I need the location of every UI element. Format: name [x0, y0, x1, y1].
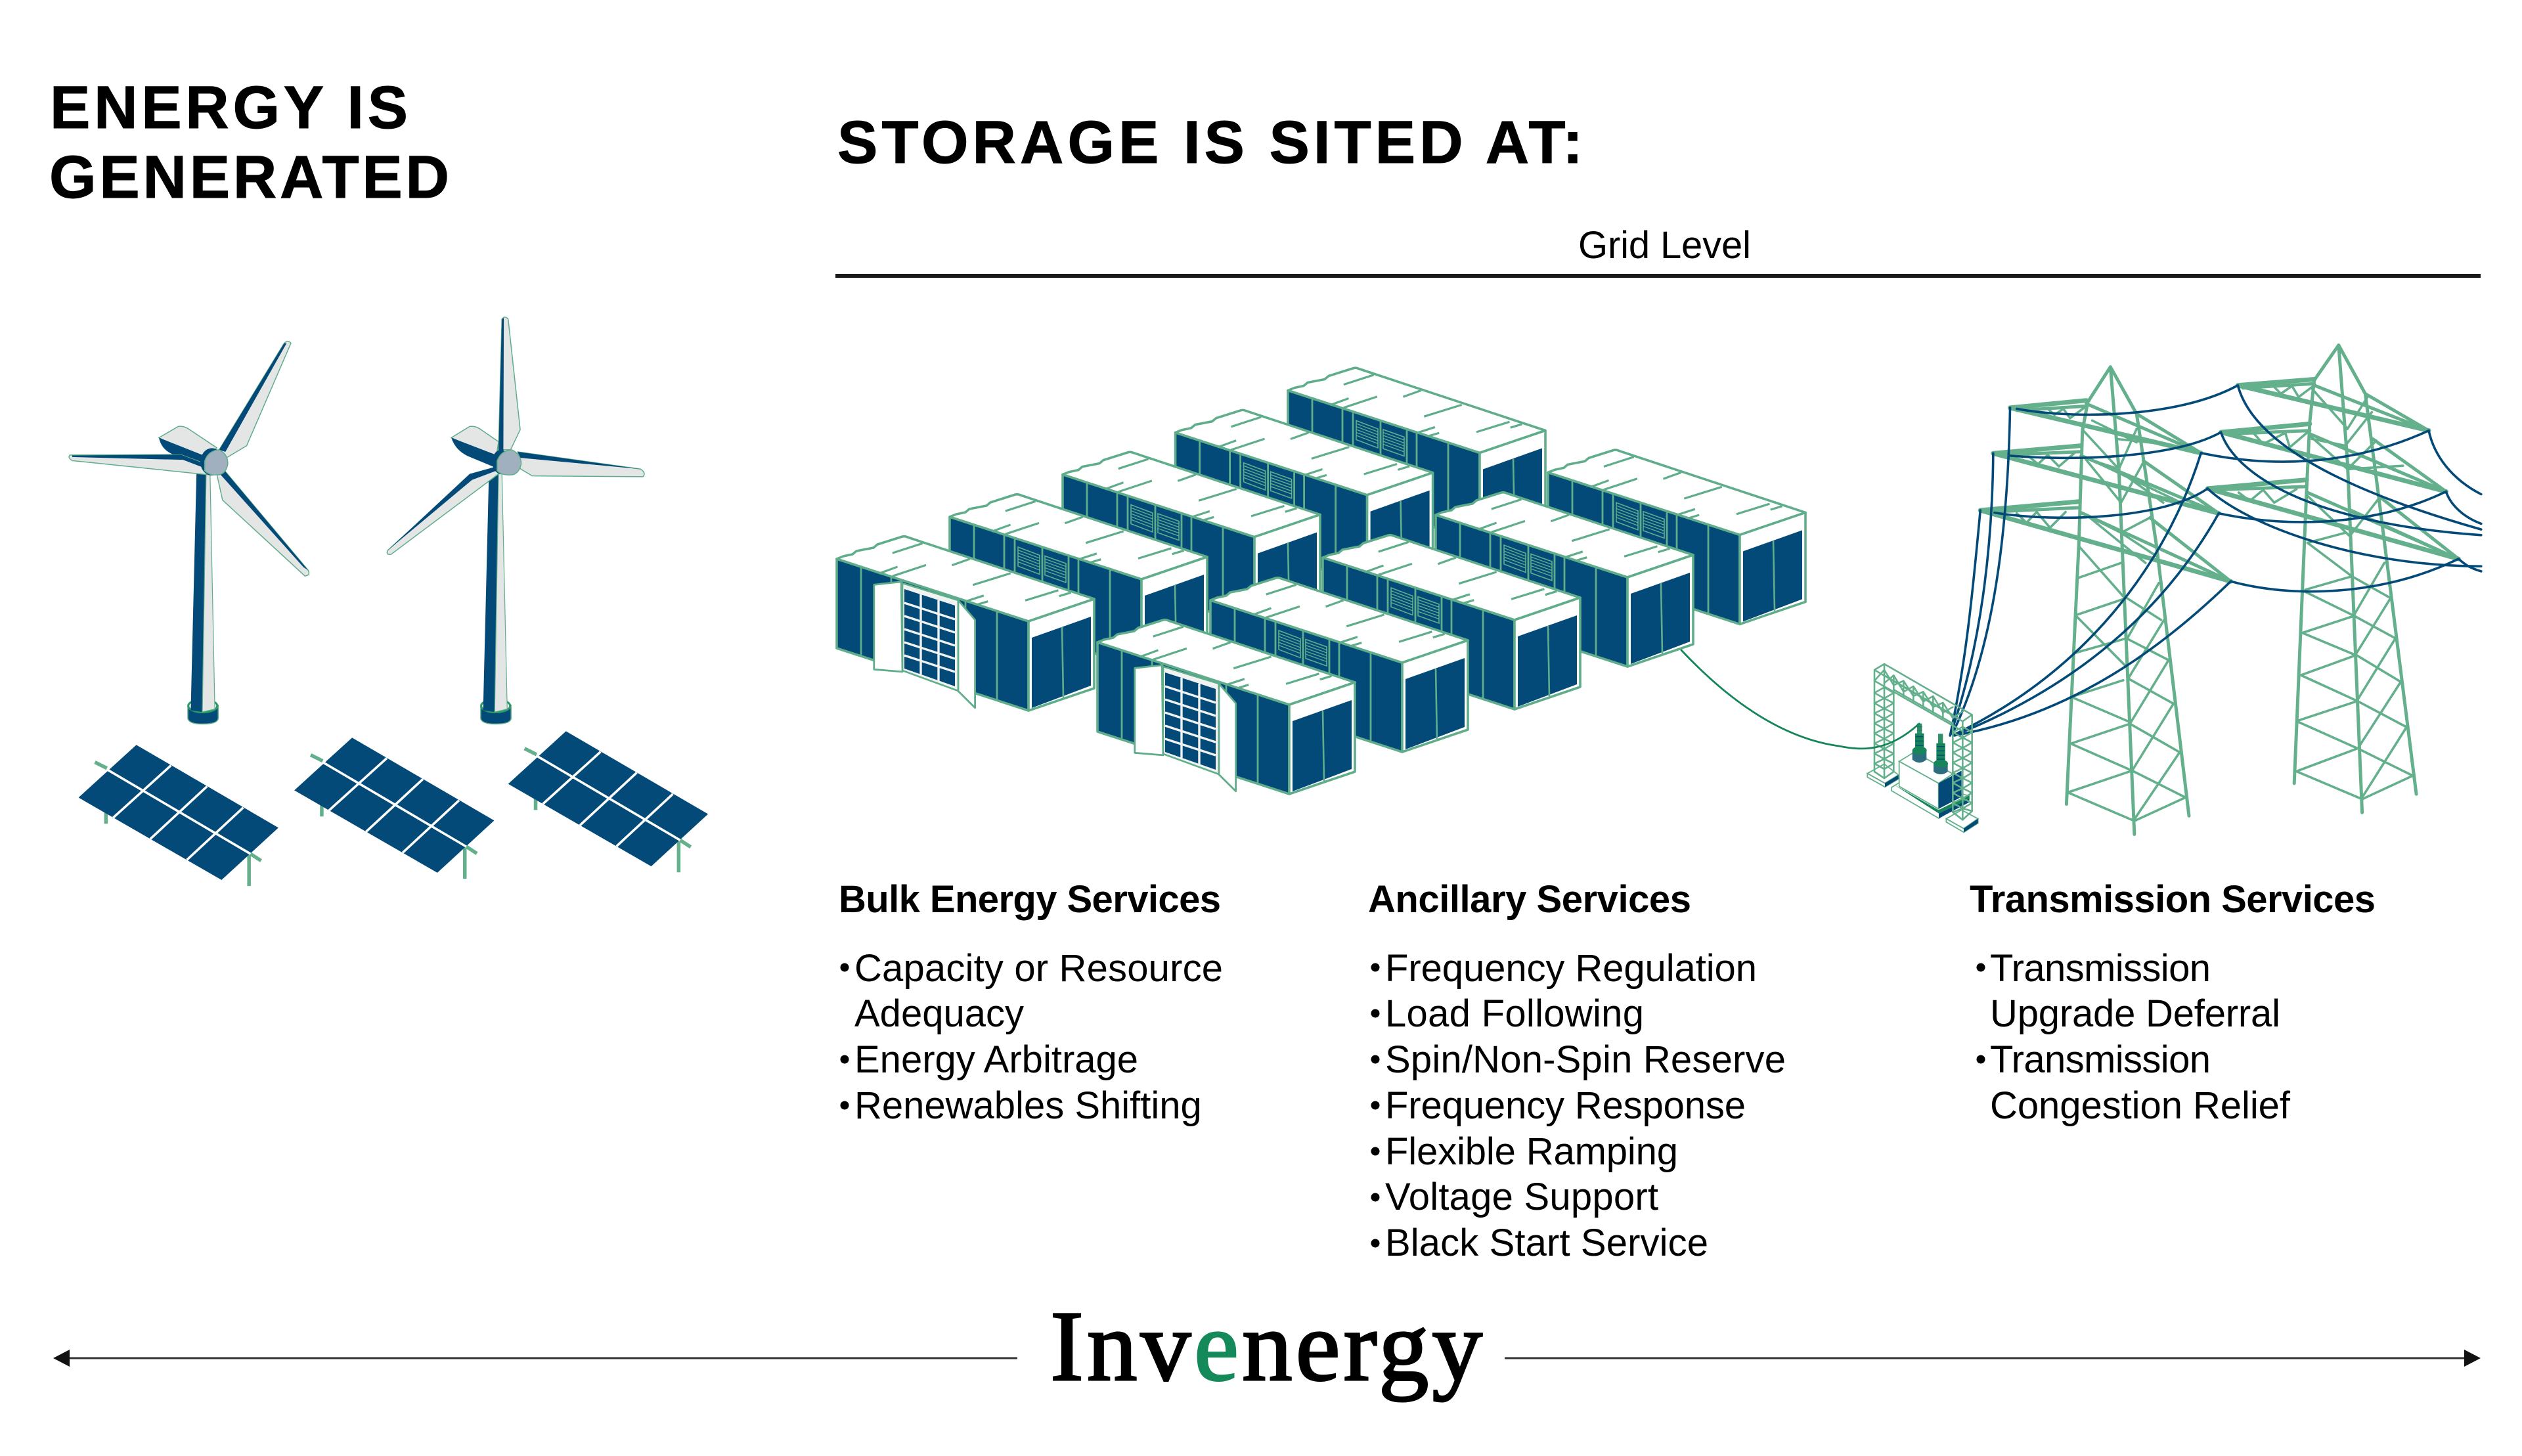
solar panel 2 — [294, 738, 494, 879]
right gantry foot — [1946, 810, 1978, 832]
list: bulk energy services: Renewables Shifting — [854, 1084, 1202, 1127]
container row back 3 — [1063, 452, 1320, 627]
list: ancillary services: Load Following — [1385, 992, 1644, 1035]
list: ancillary services: Flexible Ramping — [1385, 1130, 1678, 1173]
tower 2 — [2207, 345, 2458, 812]
container row front 2 — [1210, 578, 1468, 752]
cable from batteries to substation — [1681, 650, 1919, 749]
heading: grid level: Grid Level — [1578, 224, 1751, 267]
list: bulk energy services — [841, 947, 1223, 1127]
bushing 2 — [1934, 734, 1948, 774]
list: transmission services: Congestion Relief — [1990, 1084, 2291, 1127]
container row back 4 — [1176, 410, 1433, 585]
transformer base — [1892, 780, 1969, 818]
column: bulk energy services — [839, 878, 1223, 1127]
transformer body — [1899, 752, 1962, 809]
container with open door, front row — [1097, 620, 1355, 794]
column: ancillary services — [1368, 878, 1786, 1264]
wind turbine 2 — [387, 317, 644, 724]
tower 1 — [1980, 367, 2231, 834]
solar panel 1 — [79, 745, 278, 886]
list: bulk energy services: Capacity or Resource — [854, 947, 1223, 990]
bushing 1 — [1913, 724, 1927, 762]
wind turbines — [69, 317, 708, 886]
container row back 2 — [950, 495, 1207, 669]
list: transmission services: Transmission — [1990, 1038, 2211, 1081]
title: energy is generated — [49, 74, 449, 211]
arrow: left — [53, 1350, 1017, 1367]
list: bulk energy services: Energy Arbitrage — [854, 1038, 1138, 1081]
wind turbine 1 — [69, 342, 309, 724]
list: ancillary services: Spin/Non-Spin Reserve — [1385, 1038, 1786, 1081]
list: bulk energy services: Adequacy — [854, 992, 1024, 1035]
container row front 5 — [1548, 450, 1805, 624]
heading: transmission services: Transmission Services — [1970, 878, 2376, 921]
list: transmission services: Upgrade Deferral — [1990, 992, 2280, 1035]
list: transmission services: Transmission — [1990, 947, 2211, 990]
transmission towers — [1950, 345, 2481, 834]
column: transmission services — [1970, 878, 2376, 1127]
container with open door, back row — [837, 537, 1094, 711]
container row back 5 — [1288, 368, 1545, 542]
list: ancillary services: Black Start Service — [1385, 1222, 1708, 1264]
title: energy is generated: GENERATED — [49, 144, 449, 211]
list: ancillary services — [1371, 947, 1786, 1264]
container row front 4 — [1436, 493, 1693, 667]
left gantry foot — [1867, 764, 1899, 787]
substation — [1867, 664, 1978, 832]
heading: bulk energy services: Bulk Energy Services — [839, 878, 1221, 921]
list: ancillary services: Frequency Regulation — [1385, 947, 1757, 990]
container row front 3 — [1323, 535, 1580, 709]
list: transmission services — [1977, 947, 2291, 1127]
heading: ancillary services: Ancillary Services — [1368, 878, 1691, 921]
title: storage is sited at: STORAGE IS SITED AT: — [837, 109, 1583, 176]
power lines — [1950, 386, 2481, 736]
solar panel 3 — [508, 731, 708, 872]
list: ancillary services: Frequency Response — [1385, 1084, 1746, 1127]
gantry lattice — [1874, 664, 1972, 820]
battery storage containers — [837, 368, 1805, 794]
list: ancillary services: Voltage Support — [1385, 1176, 1658, 1218]
axis rule: grid level — [835, 274, 2481, 278]
title: energy is generated: ENERGY IS — [50, 74, 408, 141]
arrow: right — [1505, 1350, 2481, 1367]
logo: invenergy: Invenergy — [1050, 1291, 1482, 1402]
